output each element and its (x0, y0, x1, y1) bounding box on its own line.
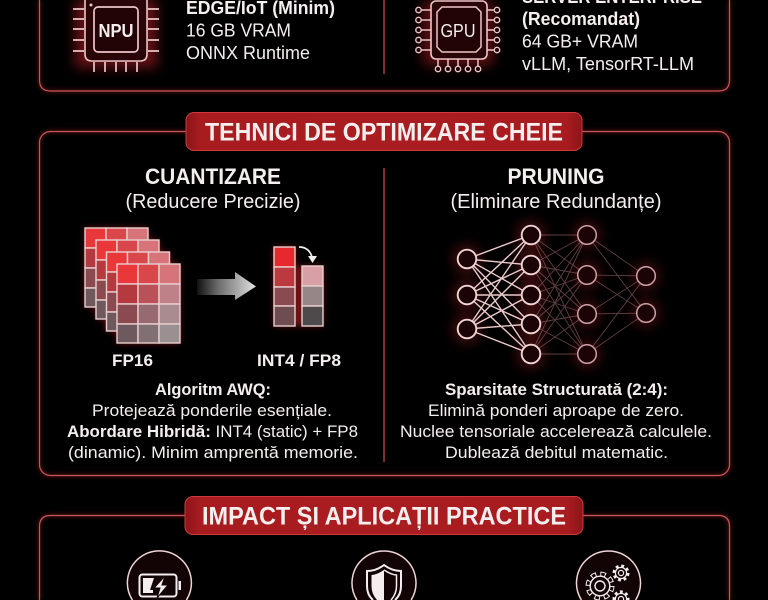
text: quantization details: Protejează ponderile esențiale. (92, 401, 332, 420)
icon: NPU chip (73, 0, 159, 72)
chart: FP16 tensor stack (85, 228, 180, 370)
text: quantization details (67, 380, 358, 462)
text: server requirements: (Recomandat) (522, 8, 640, 29)
chart: INT4 and FP8 columns: INT4 / FP8 (257, 351, 341, 370)
text: server requirements: 64 GB+ VRAM (522, 30, 638, 52)
text: edge requirements: 16 GB VRAM (186, 20, 291, 40)
icon: gears (577, 551, 641, 600)
text: quantization details: Algoritm AWQ: (155, 380, 271, 399)
heading: quantization (126, 164, 300, 213)
text: edge requirements (186, 0, 335, 63)
chart: INT4 and FP8 columns (257, 247, 341, 370)
icon: GPU chip: GPU (440, 21, 476, 41)
heading: key optimization techniques (186, 112, 582, 150)
text: pruning details (400, 380, 712, 462)
text: edge requirements: ONNX Runtime (186, 42, 310, 63)
text: pruning details: Dublează debitul matematic. (445, 443, 668, 462)
arrow: quantization direction (197, 272, 256, 300)
chart: neural network (452, 220, 660, 369)
icon: shield (352, 551, 416, 600)
text: quantization details: (dinamic). Minim amprentă memorie. (68, 443, 358, 462)
text: pruning details: Sparsitate Structurată (2:4): (445, 380, 668, 399)
icon: GPU chip (416, 0, 500, 72)
text: server requirements (522, 0, 702, 74)
icon: battery (127, 551, 191, 600)
text: server requirements: vLLM, TensorRT-LLM (522, 53, 694, 74)
heading: quantization: (Reducere Precizie) (126, 191, 300, 213)
chart: FP16 tensor stack: FP16 (112, 351, 153, 370)
heading: pruning: (Eliminare Redundanțe) (450, 191, 662, 213)
heading: impact and practical applications (185, 496, 583, 534)
heading: pruning (450, 164, 662, 213)
heading: pruning: PRUNING (508, 164, 604, 189)
panel: hardware requirements (40, 0, 730, 91)
heading: quantization: CUANTIZARE (145, 164, 281, 189)
heading: impact and practical applications: IMPACT ȘI APLICAȚII PRACTICE (202, 502, 566, 530)
panel: optimization techniques (40, 112, 730, 476)
text: pruning details: Elimină ponderi aproape de zero. (428, 401, 684, 420)
text: quantization details: Abordare Hibridă: INT4 (static) + FP8 (67, 422, 358, 441)
text: pruning details: Nuclee tensoriale accelerează calculele. (400, 422, 712, 441)
icon: NPU chip: NPU (98, 21, 134, 41)
panel: impact and practical applications (40, 496, 730, 600)
heading: key optimization techniques: TEHNICI DE OPTIMIZARE CHEIE (205, 118, 563, 146)
